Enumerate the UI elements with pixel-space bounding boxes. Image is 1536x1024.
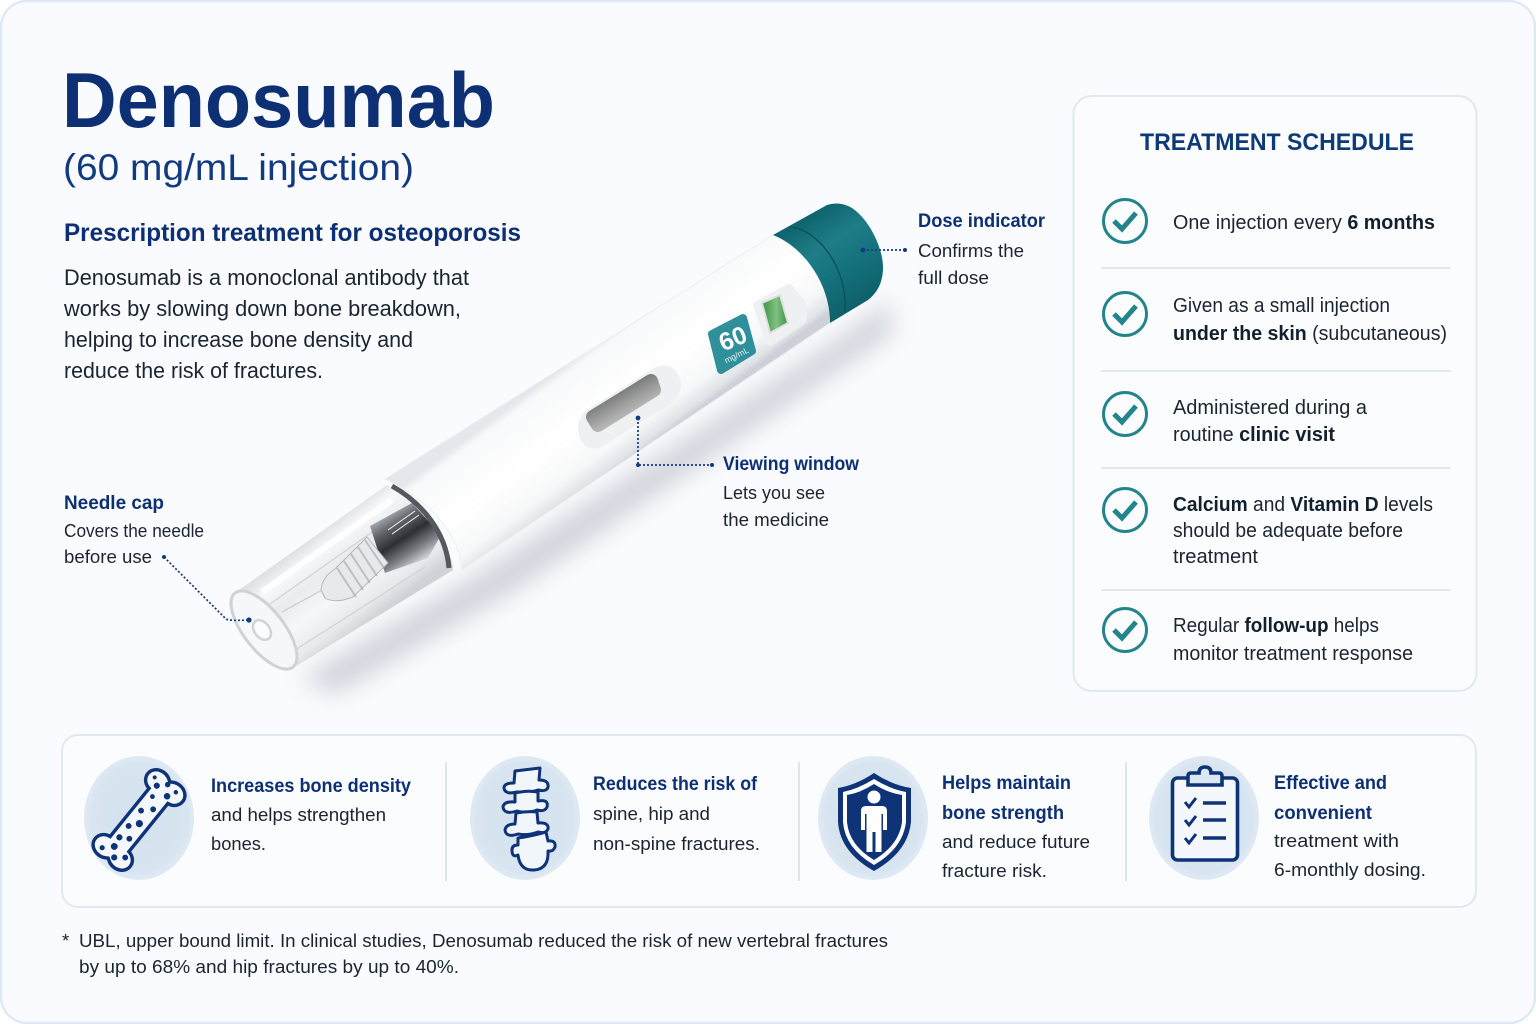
viewing window	[593, 381, 654, 425]
callout: needle cap	[64, 493, 252, 623]
benefit: bone strength	[818, 756, 1090, 881]
item: clinic visit: routine clinic visit	[1173, 424, 1335, 446]
benefit: bone density: Increases bone density	[211, 776, 411, 797]
item: follow-up	[1104, 608, 1413, 665]
icon: clipboard checklist	[1172, 767, 1238, 860]
pen shadow	[300, 300, 892, 695]
benefit: bone strength: Helps maintain	[942, 773, 1071, 794]
benefit: fracture risk: spine, hip and	[593, 803, 710, 824]
pen body	[385, 235, 830, 570]
benefit: convenient: treatment with	[1274, 830, 1399, 851]
callout: dose indicator	[861, 211, 1046, 288]
subtitle: (60 mg/mL injection)	[63, 147, 414, 188]
item: every 6 months	[1104, 200, 1435, 242]
viewing window recess	[583, 370, 676, 444]
icon: shield with person	[838, 773, 911, 871]
cap end face	[219, 581, 309, 679]
benefit: fracture risk: non-spine fractures.	[593, 833, 760, 854]
callout: viewing window: the medicine	[723, 509, 829, 530]
callout: dose indicator: Dose indicator	[918, 211, 1046, 232]
item: follow-up: monitor treatment response	[1173, 643, 1413, 665]
heading: prescription treatment: Prescription treatment for osteoporosis	[64, 219, 521, 247]
callout: viewing window	[636, 416, 859, 530]
clear needle cap	[219, 485, 453, 679]
injector pen illustration	[219, 204, 883, 679]
benefit: bone strength: fracture risk.	[942, 860, 1047, 881]
benefit: convenient: convenient	[1274, 803, 1373, 824]
benefit: bone density	[84, 756, 411, 880]
strength badge: 60	[715, 321, 751, 357]
benefit: bone strength: bone strength	[942, 803, 1064, 824]
dark inner mechanism	[370, 503, 441, 573]
benefit: bone density: and helps strengthen	[211, 804, 386, 825]
item: clinic visit	[1104, 392, 1368, 446]
callout: viewing window: Viewing window	[723, 454, 859, 475]
item: every 6 months: One injection every 6 months	[1173, 212, 1435, 234]
benefit: convenient: 6-monthly dosing.	[1274, 859, 1426, 880]
benefit: fracture risk: Reduces the risk of	[593, 774, 758, 795]
teal dose end	[773, 204, 883, 323]
benefit: convenient	[1149, 756, 1426, 880]
callout: needle cap: Covers the needle	[64, 520, 204, 541]
item: calcium and vitamin D: Calcium and Vitamin D levels	[1173, 494, 1433, 516]
strength badge	[712, 318, 752, 370]
green dose indicator	[762, 295, 788, 333]
footnote: by up to 68% and hip fractures by up to 40%.	[79, 956, 459, 977]
icon: bone	[88, 765, 190, 875]
callout: dose indicator: full dose	[918, 267, 989, 288]
panel: treatment schedule	[1074, 96, 1476, 691]
benefit: convenient: Effective and	[1274, 773, 1387, 794]
footnote: *	[62, 930, 69, 951]
intro text block: works by slowing down bone breakdown,	[63, 296, 461, 321]
intro text block: Denosumab is a monoclonal antibody that	[64, 265, 469, 290]
green dose indicator recess	[757, 288, 803, 342]
intro text block: reduce the risk of fractures.	[64, 358, 323, 383]
ribbed needle hub	[321, 537, 388, 601]
item: calcium and vitamin D	[1104, 488, 1433, 568]
intro text block	[63, 265, 469, 383]
item: under the skin: under the skin (subcutaneous)	[1173, 323, 1447, 345]
icon: spine	[503, 768, 555, 870]
callout: viewing window: Lets you see	[723, 482, 825, 503]
item: calcium and vitamin D: should be adequate before	[1173, 520, 1403, 542]
strength badge: mg/mL	[723, 345, 751, 365]
title: Denosumab	[62, 56, 495, 144]
cap nozzle hole	[249, 617, 275, 643]
item: calcium and vitamin D: treatment	[1173, 546, 1258, 568]
callout: needle cap: Needle cap	[64, 493, 164, 514]
collar ring	[392, 486, 449, 568]
item: clinic visit: Administered during a	[1173, 397, 1368, 419]
item: under the skin	[1104, 292, 1447, 345]
panel: benefits	[62, 735, 1476, 907]
footnote: UBL, upper bound limit. In clinical studies, Denosumab reduced the risk of new vertebral fractures	[79, 930, 888, 951]
callout: needle cap: before use	[64, 546, 152, 567]
item: follow-up: Regular follow-up helps	[1173, 615, 1379, 637]
benefit: bone strength: and reduce future	[942, 831, 1090, 852]
callout: dose indicator: Confirms the	[918, 240, 1024, 261]
benefit: fracture risk	[470, 756, 760, 880]
intro text block: helping to increase bone density and	[64, 327, 413, 352]
schedule heading: TREATMENT SCHEDULE	[1140, 129, 1414, 156]
footnote	[62, 930, 888, 977]
benefit: bone density: bones.	[211, 833, 266, 854]
item: under the skin: Given as a small injection	[1173, 295, 1390, 317]
